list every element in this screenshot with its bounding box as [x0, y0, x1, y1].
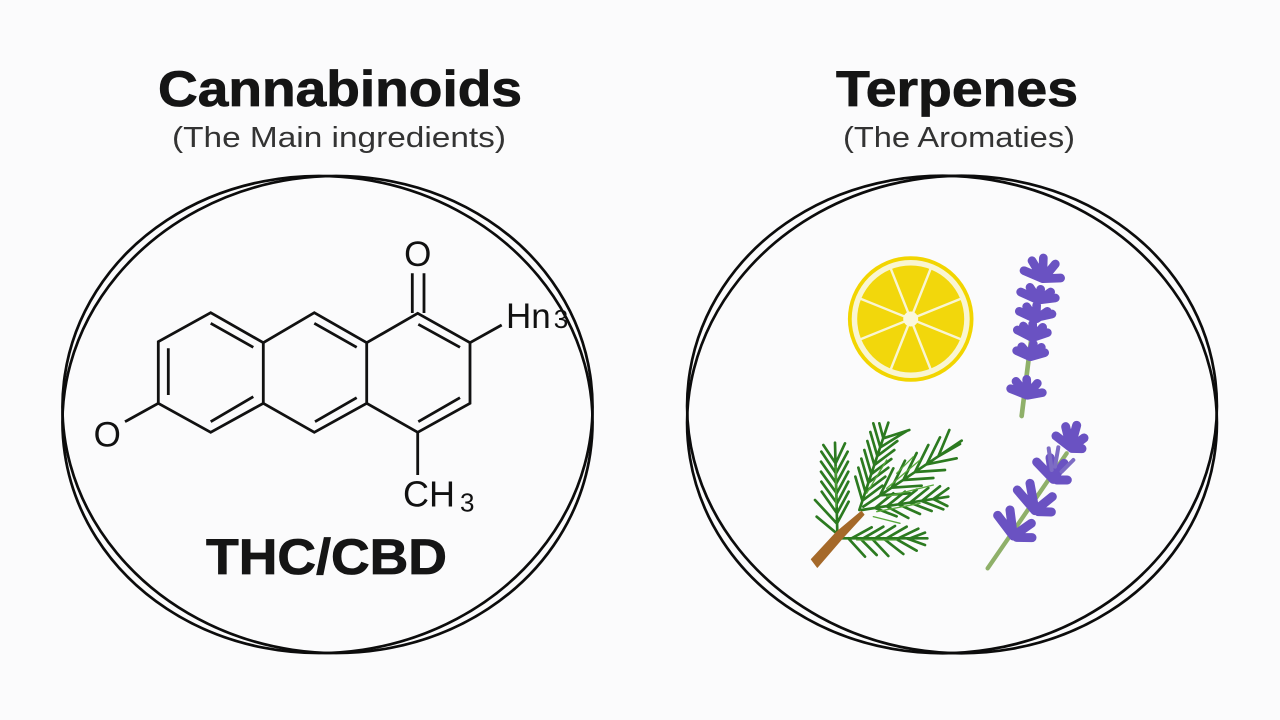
panel: cannabinoids	[30, 61, 625, 689]
icon: lemon slice	[848, 256, 974, 382]
icon: diagonal lavender sprig	[988, 425, 1084, 568]
atom label: CH3: CH	[403, 474, 455, 514]
molecule diagram	[94, 235, 568, 518]
molecule bonds	[125, 273, 502, 475]
icon: pine sprig	[811, 423, 962, 567]
heading: Cannabinoids: Cannabinoids	[158, 61, 522, 117]
label: THC/CBD: THC/CBD	[206, 529, 447, 585]
panel: terpenes	[651, 61, 1253, 693]
atom label: top oxygen: O	[404, 235, 431, 274]
upper branch	[855, 423, 909, 510]
atom label: left oxygen: O	[94, 416, 121, 454]
subheading: main ingredients: (The Main ingredients)	[172, 122, 506, 154]
middle branch	[862, 486, 948, 518]
atom label: Hn3: Hn3	[506, 297, 568, 336]
right upper branch	[863, 430, 962, 507]
lower branch	[840, 526, 927, 557]
pine stem	[811, 511, 864, 567]
subheading: aromatics: (The Aromaties)	[843, 122, 1075, 154]
icon: upright lavender sprig	[1011, 258, 1061, 416]
double circle outline	[30, 140, 625, 689]
atom label: CH3: 3	[460, 488, 474, 518]
heading: Terpenes: Terpenes	[836, 61, 1078, 117]
double circle outline	[651, 136, 1253, 693]
left branch	[815, 443, 849, 533]
